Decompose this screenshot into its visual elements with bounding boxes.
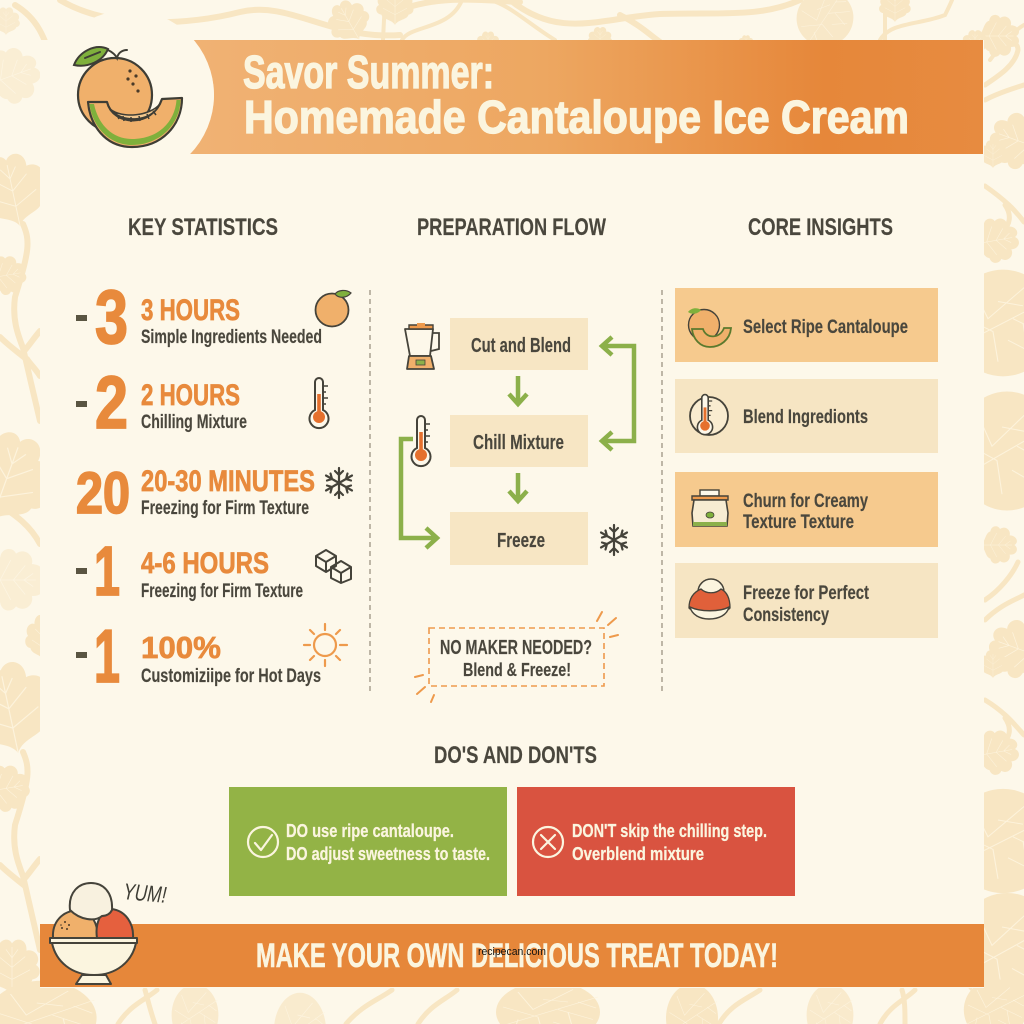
step: cut and blend [450, 318, 588, 370]
column headings: KEY STATISTICS [128, 214, 278, 241]
stat: 2 hours: Chilling Mixture [141, 412, 247, 433]
callout: no maker needed [415, 612, 618, 702]
stat: 4-6 hours: Freezing for Firm Texture [141, 581, 303, 602]
watermark: recipecan.com [478, 946, 546, 958]
dashed column dividers [370, 290, 662, 692]
icon: ice cream bowl [50, 878, 170, 984]
callout: no maker needed: Blend & Freeze! [463, 660, 571, 680]
icon: cross [533, 827, 563, 857]
insight: blend ingredients: Blend Ingredionts [743, 406, 868, 428]
stat: 100% [76, 614, 347, 698]
arrows between steps [401, 337, 634, 548]
insight: freeze [675, 563, 938, 638]
stat: 3 hours [76, 275, 351, 360]
panel: do: DO use ripe cantaloupe. [286, 820, 454, 841]
insight: churn: Texture Texture [743, 511, 854, 533]
header banner [44, 10, 983, 180]
stat: 20-30 minutes: Freezing for Firm Texture [141, 498, 309, 519]
panel: do [229, 787, 507, 896]
stat: 20-30 minutes [76, 461, 352, 526]
white circle behind logo [44, 10, 214, 180]
step: cut and blend: Cut and Blend [471, 335, 571, 357]
title [243, 46, 909, 143]
step: freeze [450, 512, 588, 565]
footer banner: MAKE YOUR OWN DELICIOUS TREAT TODAY! [256, 937, 778, 975]
insight: select ripe cantaloupe [675, 288, 938, 362]
callout: no maker needed: NO MAKER NEODED? [440, 637, 592, 659]
stat: 2 hours: 2 [95, 361, 128, 444]
stat: 100%: 1 [94, 614, 120, 698]
stat: 2 hours: 2 HOURS [141, 379, 240, 412]
stat: 100%: 100% [141, 630, 221, 665]
stat: 3 hours: Simple Ingredients Needed [141, 327, 322, 348]
yum label: YUM! [121, 878, 170, 908]
stat: 20-30 minutes: 20 [76, 461, 130, 526]
panel: key statistics [76, 275, 352, 698]
stat: 3 hours: 3 HOURS [141, 294, 240, 327]
panel: core insights [675, 288, 938, 638]
title: Homemade Cantaloupe Ice Cream [244, 91, 909, 143]
panel: don't [517, 787, 795, 896]
column headings: PREPARATION FLOW [417, 214, 606, 241]
panel: preparation flow [401, 318, 634, 702]
icon: snowflake [601, 525, 627, 555]
stat: 4-6 hours [76, 532, 351, 610]
insight: freeze: Freeze for Perfect [743, 582, 869, 604]
leaves right [951, 15, 1024, 1007]
panel: don't: Overblend mixture [572, 843, 704, 864]
icon: check [248, 827, 278, 857]
insight: churn: Churn for Creamy [743, 490, 868, 512]
insight: churn [675, 472, 938, 547]
footer banner [40, 924, 984, 987]
column headings: CORE INSIGHTS [748, 214, 893, 241]
stat: 20-30 minutes: 20-30 MINUTES [141, 465, 315, 498]
stat: 4-6 hours: 1 [94, 532, 120, 610]
insight: blend ingredients [675, 379, 938, 453]
icon: blender [405, 323, 439, 369]
leaves bottom [0, 979, 1024, 1024]
panel: do: DO adjust sweetness to taste. [286, 843, 490, 864]
step: freeze: Freeze [497, 530, 545, 552]
leaves left [0, 7, 65, 995]
leaves top [320, 0, 988, 56]
icon: thermometer [412, 416, 430, 466]
stat: 4-6 hours: 4-6 HOURS [141, 547, 269, 580]
icon: cantaloupe logo [74, 47, 182, 147]
step: chill mixture [450, 415, 588, 467]
stat: 3 hours: 3 [95, 275, 128, 360]
heading: do's and don'ts: DO'S AND DON'TS [434, 742, 597, 769]
column headings [128, 214, 893, 241]
title: Savor Summer: [243, 46, 494, 98]
insight: select ripe cantaloupe: Select Ripe Cantaloupe [743, 316, 908, 338]
step: chill mixture: Chill Mixture [473, 432, 564, 454]
panel: don't: DON'T skip the chilling step. [572, 820, 767, 841]
insight: freeze: Consistency [743, 604, 829, 626]
stat: 100%: Customiziipe for Hot Days [141, 666, 321, 687]
stat: 2 hours [76, 361, 328, 444]
